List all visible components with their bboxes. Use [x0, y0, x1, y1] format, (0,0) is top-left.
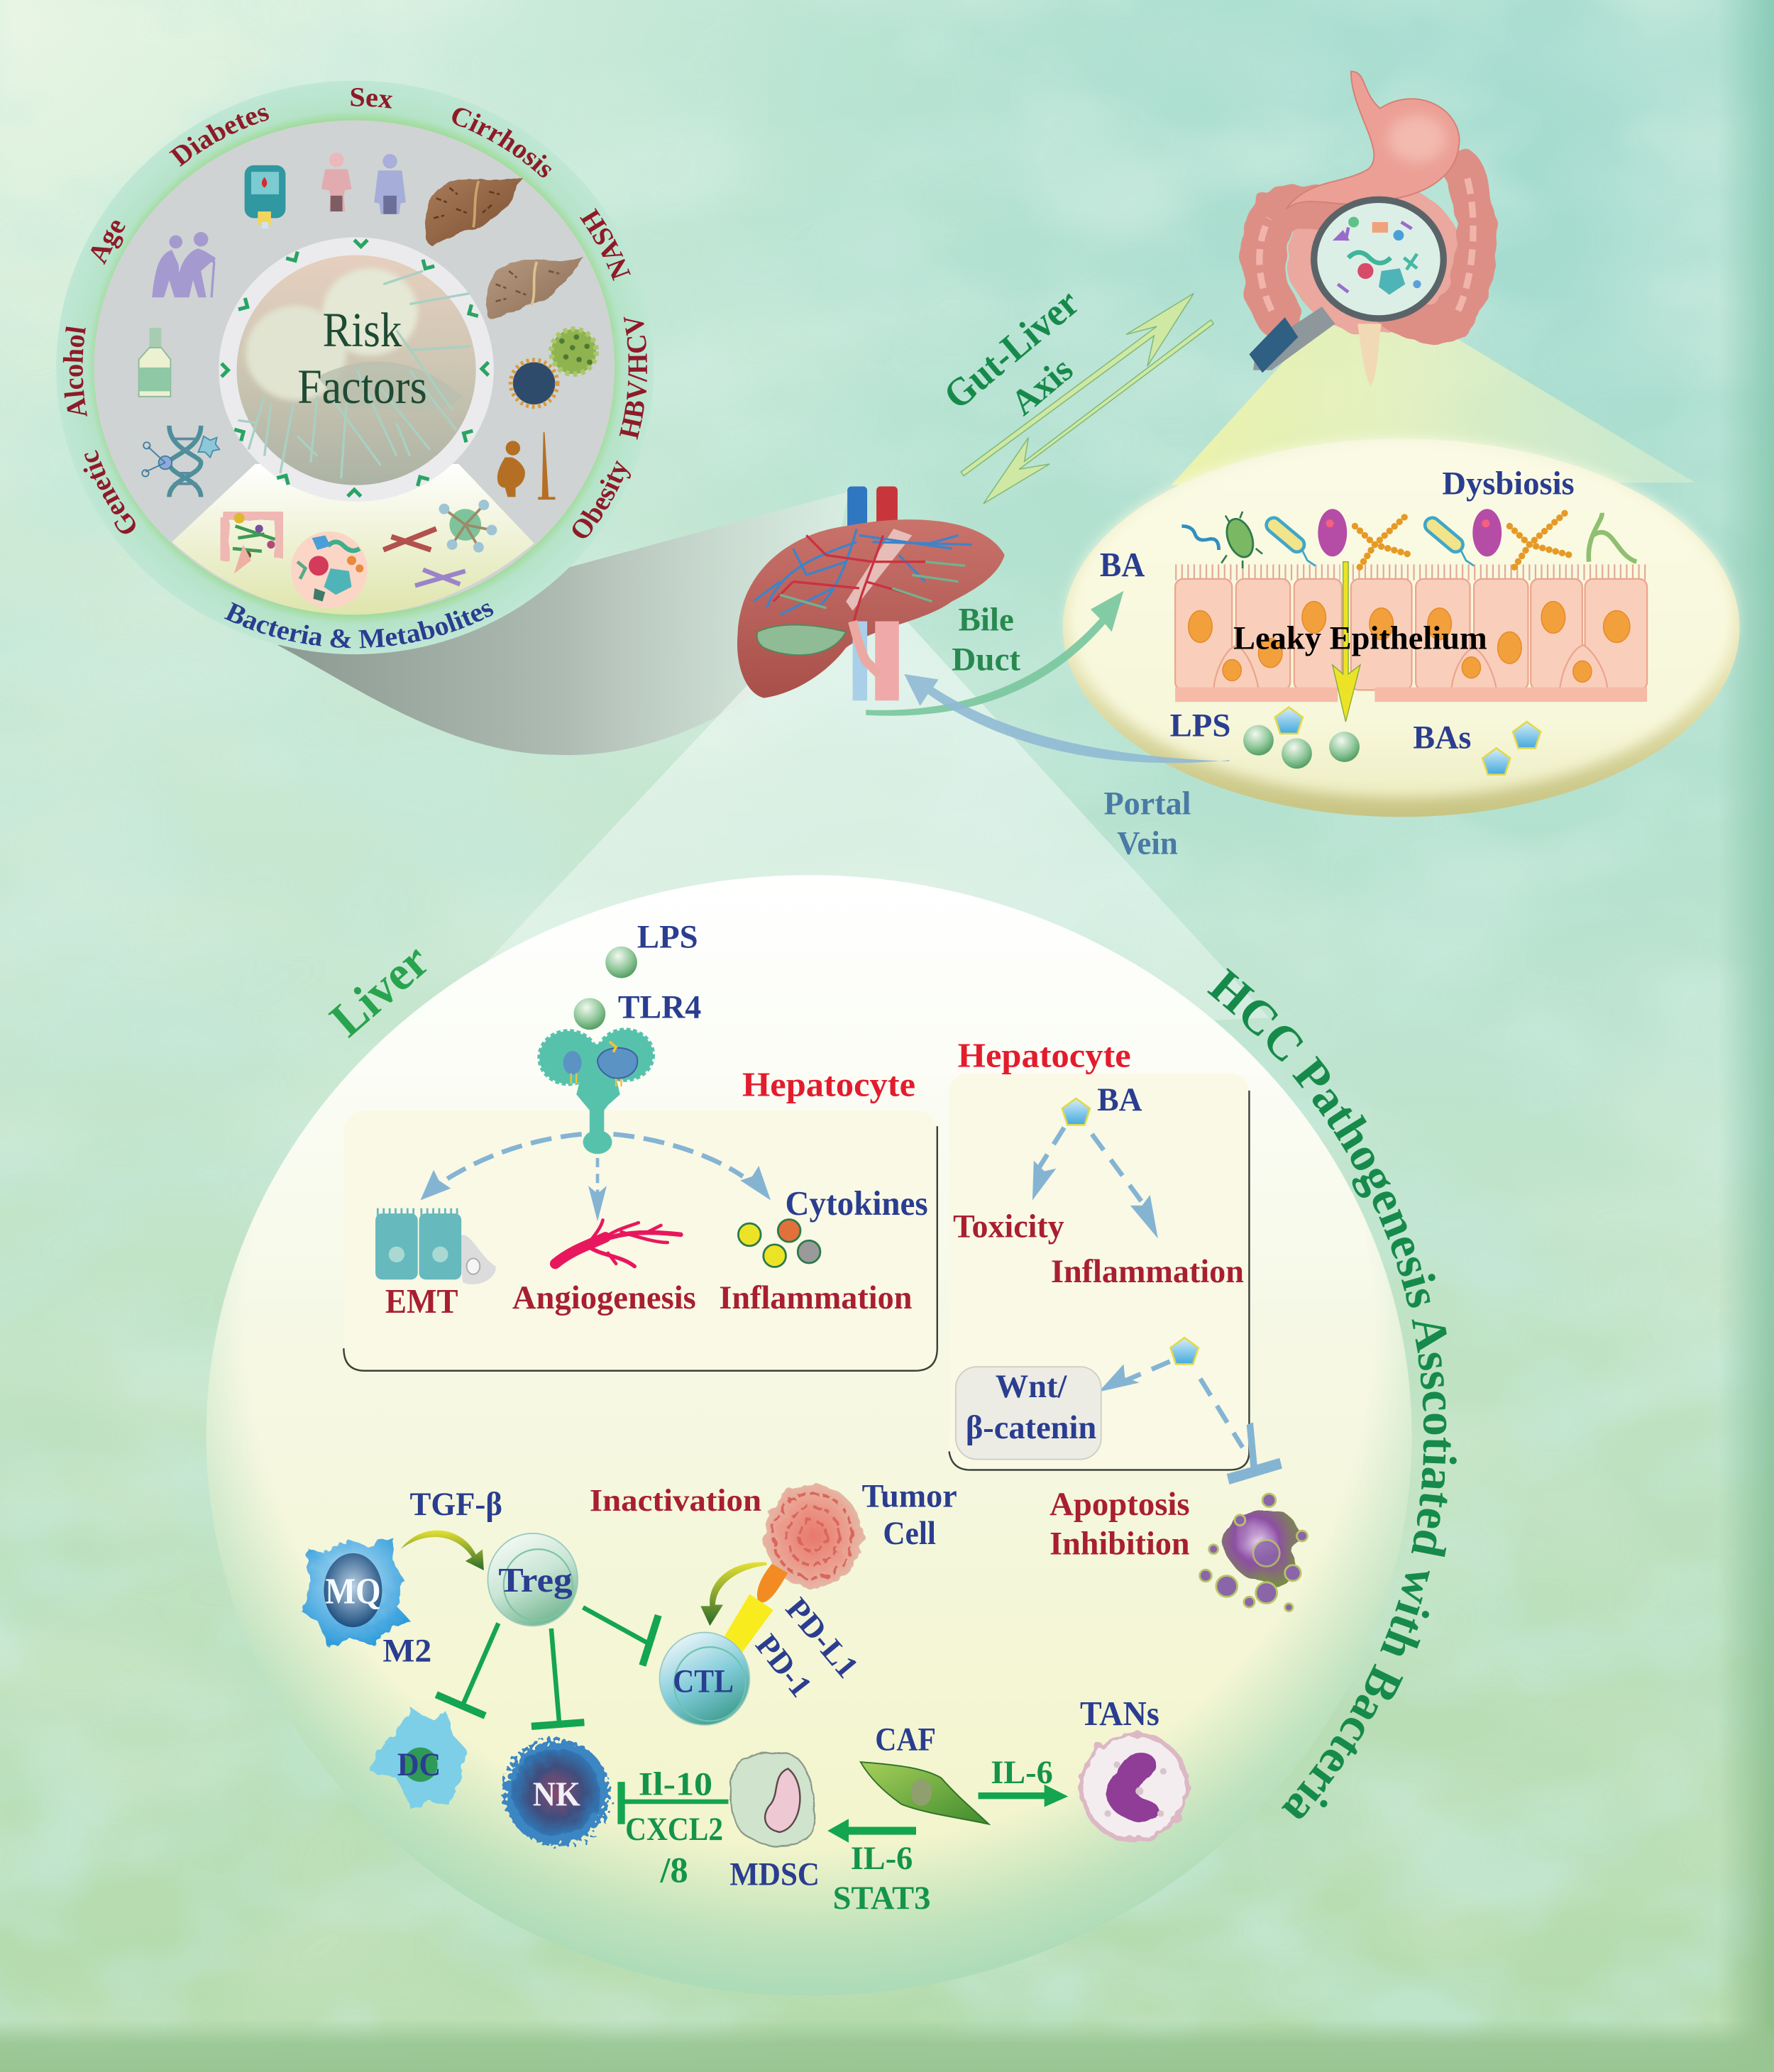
LPS and TLR4 labels with balls: LPS — [637, 920, 698, 956]
label: inactivation, tumor cell, TGF-b — [410, 1479, 957, 1552]
bacteria wedge — [172, 464, 534, 615]
label: Gut-Liver Axis: Axis — [1003, 349, 1080, 423]
ring labels: Cirrhosis — [452, 108, 552, 177]
PD-L1 and PD-1 — [720, 1564, 866, 1704]
grey inner disk — [94, 121, 615, 615]
labels: LPS — [1170, 708, 1230, 744]
label: inactivation, tumor cell, TGF-b: TGF-β — [410, 1487, 502, 1523]
icon: TANs neutrophil: TANs — [1080, 1695, 1159, 1733]
icon: macrophage M2 — [303, 1537, 431, 1670]
cell: MDSC: MDSC — [729, 1856, 820, 1892]
labels: Inflammation — [719, 1280, 912, 1316]
icon: stomach and intestines — [1249, 72, 1475, 386]
panel: hepatocyte bile acids: Hepatocyte — [958, 1037, 1131, 1074]
icon: obesity — [497, 432, 555, 500]
light cone: liver to big circle — [397, 605, 1269, 1057]
arrow: tumor to CTL — [700, 1563, 766, 1626]
icon: glucose meter — [245, 165, 285, 228]
labels: Cytokines — [786, 1185, 928, 1223]
icon: CAF — [861, 1721, 988, 1824]
labels: BAs — [1413, 720, 1471, 756]
title: Risk Factors: Factors — [297, 360, 427, 414]
magnifier lens with microbes — [1314, 199, 1443, 319]
cell: NK: NK — [533, 1776, 580, 1814]
green cytokine labels: Il-10 — [639, 1767, 712, 1803]
liver body — [737, 519, 1005, 698]
LPS and TLR4 labels with balls — [574, 920, 701, 1030]
icon: NASH liver — [486, 256, 583, 320]
bacteria row — [1181, 509, 1636, 568]
arrow: portal vein — [904, 674, 1229, 763]
cell: DC — [370, 1709, 468, 1811]
appendix — [1357, 324, 1382, 386]
ring labels: NASH — [580, 208, 631, 281]
icon: viruses — [511, 329, 596, 407]
labels: Angiogenesis — [512, 1280, 696, 1316]
ring labels: Age — [91, 221, 125, 265]
epithelium cells — [1175, 579, 1647, 702]
labels: BA — [1100, 546, 1145, 584]
panel: hepatocyte bile acids: BA — [1097, 1082, 1142, 1118]
chevrons around centre — [221, 240, 488, 496]
label: Apoptosis Inhibition: Inhibition — [1049, 1526, 1190, 1563]
inhibitory bars: Treg — [436, 1607, 728, 1824]
arrow: liver to gut — [984, 320, 1213, 504]
label: Apoptosis Inhibition — [1049, 1487, 1190, 1563]
nuclei — [1189, 602, 1630, 682]
panel: hepatocyte bile acids: Toxicity — [953, 1209, 1064, 1245]
cell: Treg — [487, 1533, 578, 1626]
shadow cone: risk factors to liver — [277, 492, 849, 755]
centre image ring — [219, 237, 494, 502]
icon: colon with bacteria — [224, 513, 280, 573]
icon: apoptotic cell — [1200, 1494, 1307, 1611]
cell: CTL: CTL — [673, 1663, 734, 1699]
box: Wnt/β-catenin: β-catenin — [966, 1410, 1096, 1446]
icon: metabolites — [383, 500, 497, 585]
label: portal vein — [1104, 786, 1191, 861]
labels — [385, 1066, 928, 1321]
stomach — [1287, 72, 1460, 209]
green cytokine labels: IL-6 — [991, 1755, 1053, 1791]
icon: macrophage M2: MQ — [325, 1572, 381, 1612]
icon: cytokines — [738, 1219, 820, 1267]
green cytokine labels: CXCL2 — [625, 1812, 723, 1848]
labels — [1100, 466, 1575, 756]
box: Wnt/β-catenin: Wnt/ — [996, 1369, 1067, 1405]
magnifier handle — [1253, 307, 1335, 370]
label: portal vein: Vein — [1117, 825, 1178, 861]
receptor TLR4 — [539, 1030, 653, 1154]
panel: liver circle — [206, 875, 1412, 1996]
cone: gut to epithelium — [1172, 320, 1695, 485]
green cytokine labels — [625, 1755, 1053, 1917]
green cytokine labels: /8 — [660, 1851, 688, 1890]
icon: cirrhotic liver — [425, 177, 522, 246]
arrow: bile duct — [866, 591, 1123, 716]
label: Apoptosis Inhibition: Apoptosis — [1049, 1487, 1190, 1523]
label: bile duct — [952, 602, 1021, 678]
icon: angiogenesis vessel — [555, 1220, 681, 1267]
colon — [1263, 169, 1475, 324]
ring labels: Diabetes — [169, 108, 269, 167]
arrows: cytokine signalling — [827, 1785, 1068, 1843]
icon: TANs neutrophil — [1080, 1695, 1187, 1840]
title: Risk Factors: Risk — [323, 303, 402, 357]
PD-L1 and PD-1: PD-L1 — [779, 1591, 866, 1685]
ring labels: Alcohol — [62, 326, 87, 417]
label: inactivation, tumor cell, TGF-b: Inactivation — [590, 1482, 761, 1518]
arrows: TLR4 signalling — [447, 1134, 743, 1209]
arrows: bile acid effects — [1037, 1128, 1243, 1448]
blood vessels — [754, 529, 971, 628]
panel: hepatocyte TLR4 — [343, 1030, 937, 1371]
centre tumour image — [236, 255, 476, 485]
title: Risk Factors — [297, 303, 427, 414]
icon: liver with vessels — [737, 487, 1005, 700]
ring labels — [57, 82, 656, 657]
ring labels: Sex — [351, 88, 392, 109]
arrow: macrophage to Treg — [400, 1531, 484, 1570]
icon: DNA — [142, 426, 219, 497]
title: Liver: Liver — [320, 933, 439, 1047]
cell: Treg: Treg — [498, 1562, 573, 1599]
labels: Dysbiosis — [1442, 466, 1575, 502]
outer ring — [56, 81, 654, 654]
small intestine — [1287, 181, 1462, 334]
label: bile duct: Bile — [959, 602, 1014, 639]
arrow: gut to liver — [961, 294, 1194, 476]
icon: elderly couple — [152, 232, 216, 297]
title: HCC Pathogenesis curved: HCC Pathogenesis Asscotiated with Bacteria — [1207, 968, 1457, 1819]
lower vessels — [853, 622, 867, 700]
label: Gut-Liver Axis: Gut-Liver — [936, 280, 1087, 418]
icon: woman and man — [321, 153, 406, 214]
ring labels: Obesity — [572, 460, 632, 538]
panel: hepatocyte bile acids: Inflammation — [1051, 1254, 1244, 1290]
cell: CTL — [660, 1633, 749, 1725]
arrow: yellow leak — [1333, 562, 1360, 722]
label: inactivation, tumor cell, TGF-b: Tumor — [862, 1479, 957, 1515]
labels: Leaky Epithelium — [1233, 621, 1487, 657]
ring labels: HBV/HCV — [619, 316, 647, 440]
green cytokine labels: IL-6 — [851, 1841, 913, 1877]
labels: EMT — [385, 1283, 458, 1321]
labels: Hepatocyte — [742, 1066, 915, 1103]
box: Wnt/β-catenin — [956, 1367, 1101, 1460]
gallbladder — [757, 625, 846, 655]
cell: NK — [504, 1739, 610, 1846]
cell: DC: DC — [397, 1747, 441, 1783]
icon: alcohol bottle — [139, 328, 170, 397]
cell: MDSC — [729, 1753, 820, 1892]
PD-L1 and PD-1: PD-1 — [749, 1628, 819, 1704]
LPS balls and BA pentagons — [1243, 707, 1541, 775]
icon: CAF: CAF — [875, 1721, 936, 1758]
icon: EMT cells — [375, 1212, 496, 1284]
green cytokine labels: STAT3 — [833, 1880, 930, 1917]
panel: leaky gut oval — [1063, 439, 1740, 817]
label: bile duct: Duct — [952, 641, 1021, 678]
ring labels: Genetic — [84, 450, 136, 534]
icon: macrophage M2: M2 — [382, 1633, 431, 1670]
LPS and TLR4 labels with balls: TLR4 — [618, 989, 701, 1025]
ring labels: Bacteria & Metabolites — [224, 602, 494, 649]
icon: tumor cell — [764, 1484, 862, 1587]
epithelium microvilli — [1175, 568, 1647, 577]
label: inactivation, tumor cell, TGF-b: Cell — [883, 1516, 936, 1552]
panel: risk factors wheel — [56, 81, 654, 654]
label: portal vein: Portal — [1104, 786, 1191, 822]
panel: hepatocyte bile acids — [949, 1037, 1282, 1484]
icon: microbes circle — [291, 531, 368, 608]
